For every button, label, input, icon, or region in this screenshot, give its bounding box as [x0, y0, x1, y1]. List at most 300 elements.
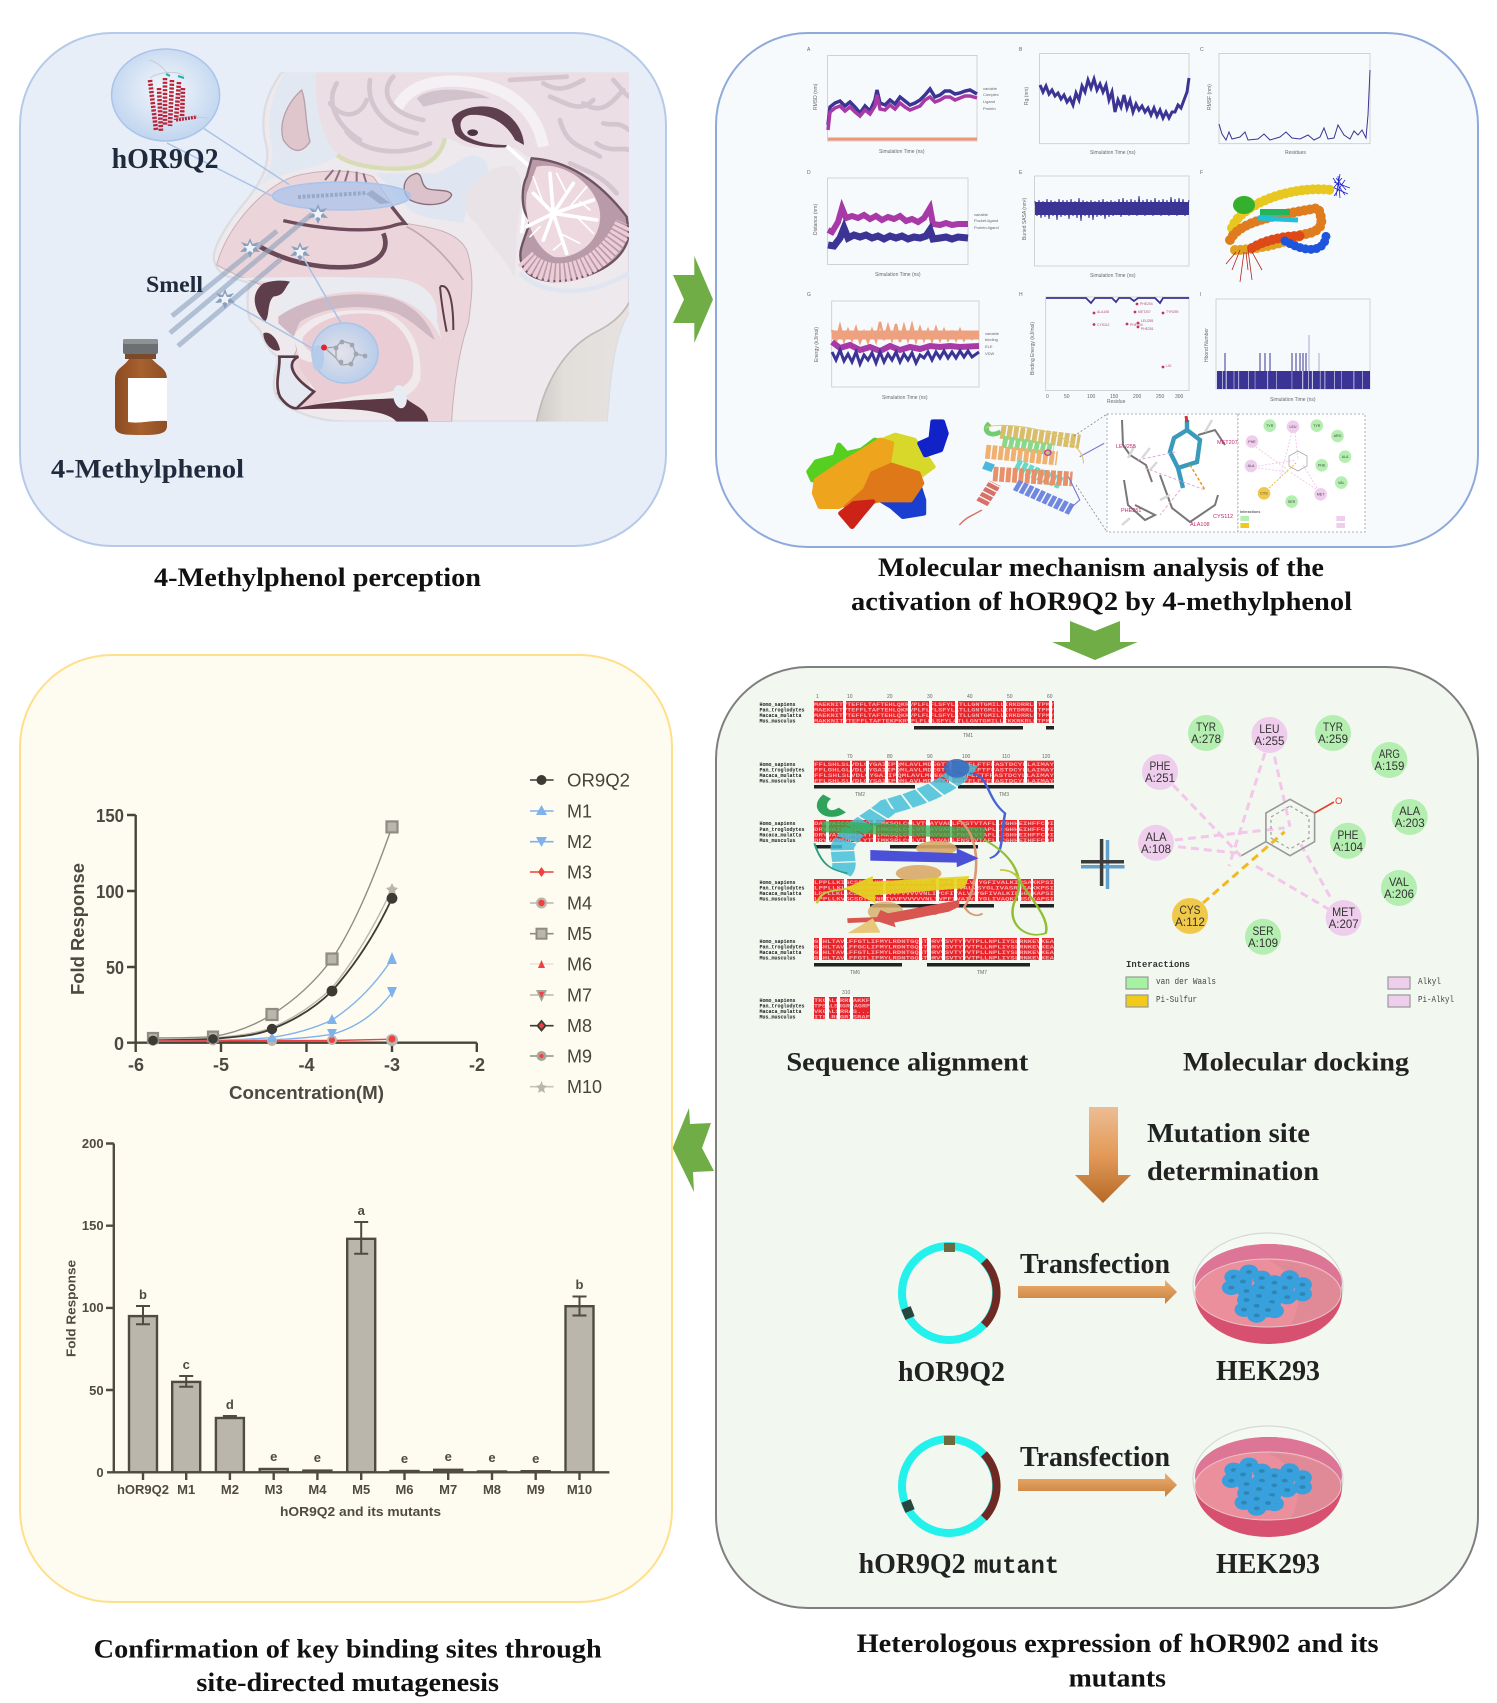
- chart D: distance: [807, 170, 999, 278]
- label: HEK293 mutant: HEK293: [1216, 1549, 1320, 1580]
- chart H: binding energy by residue: 100: [1087, 394, 1096, 400]
- bar chart: fold response: M3: [265, 1482, 283, 1497]
- icon: HEK293 culture dish mutant: [1193, 1426, 1343, 1537]
- legend: interactions: van der Waals: [1156, 977, 1216, 987]
- docking 2D mini diagram: CYS: [1260, 492, 1268, 496]
- sequence alignment blocks: DRYVAICQPLLYTTIMKSQLCGLVTGAYVAGLFNSTVTAFLLCGHHEIHFFCDI: [814, 832, 1054, 838]
- bar chart: fold response: M7: [439, 1482, 457, 1497]
- caption: molecular mechanism: Molecular mechanism analysis of the: [878, 553, 1324, 582]
- sequence alignment blocks: TKGALRRRPAKKF: [814, 998, 870, 1004]
- sequence alignment blocks: Pan_troglodytes: [760, 886, 805, 892]
- chart H: binding energy by residue: ALA108: [1097, 310, 1109, 314]
- chart A: RMSD: [807, 47, 999, 155]
- docking zoom box: 3D binding site: PHE251: [1121, 508, 1142, 514]
- sequence alignment blocks: 40: [967, 694, 973, 700]
- sequence alignment blocks: 80: [887, 754, 893, 760]
- docking 2D mini diagram: ALA: [1248, 464, 1255, 468]
- bar chart: fold response: b: [139, 1287, 147, 1302]
- icon: odorant stars: [215, 204, 328, 309]
- residue: ARG A:159: [1371, 742, 1407, 778]
- chart H: binding energy by residue: 200: [1133, 394, 1142, 400]
- residue: PHE A:251: A:251: [1145, 771, 1175, 785]
- chart A: RMSD: Protein: [983, 106, 996, 111]
- chart H: binding energy by residue: CYS112: [1097, 323, 1109, 327]
- legend: interactions: [1126, 960, 1454, 1007]
- residue: ALA A:108: ALA: [1146, 830, 1166, 844]
- docking zoom box: 3D binding site: CYS112: [1213, 514, 1233, 520]
- residue: TYR A:259: [1315, 715, 1351, 751]
- label: 4-Methylphenol: 4-Methylphenol: [51, 454, 244, 484]
- sequence alignment blocks: 90: [927, 754, 933, 760]
- chart G: energy: Energy (kJ/mol): [814, 327, 820, 362]
- chart H: binding energy by residue: PHE104: [1130, 323, 1143, 327]
- heading: Molecular docking: Molecular docking: [1183, 1048, 1409, 1077]
- chart D: distance: Simulation Time (ns): [875, 272, 921, 278]
- sequence alignment blocks: DRYVAICQPLLYTTIMKSQLCGLVTGAYVAGLFNSTVTAPLLCGHHEIHFFCDI: [814, 827, 1054, 833]
- sequence alignment blocks: TPSALSRGRPAGRP: [814, 1004, 870, 1010]
- sequence alignment blocks: Mus_musculus: [760, 1014, 796, 1020]
- chart H: binding energy by residue: MET207: [1138, 310, 1151, 314]
- bar chart: fold response: 150: [82, 1218, 104, 1233]
- sequence alignment blocks: DRYVAVCQPLLYTTIMKSRLCGLVTGAYVAGLFNSTVTAFLLCGHHEIHFFCDI: [814, 838, 1054, 844]
- bar chart: fold response: 50: [89, 1383, 104, 1398]
- chart H: binding energy by residue: LIG: [1166, 364, 1172, 368]
- residue: VAL A:206: [1381, 870, 1417, 906]
- sequence alignment blocks: ITSLRRGRISRAF: [814, 1014, 870, 1020]
- legend: dose response series: M10: [567, 1077, 602, 1097]
- line chart: dose response: -2: [469, 1055, 485, 1075]
- sequence alignment blocks: TM1: [963, 733, 973, 739]
- residue: CYS A:112: A:112: [1175, 915, 1205, 929]
- line chart: dose response: 50: [106, 958, 124, 978]
- sequence alignment blocks: Macaca_mulatta: [760, 713, 802, 719]
- caption: molecular mechanism: activation of hOR9Q2 by 4-methylphenol: [851, 587, 1352, 616]
- sequence alignment blocks: TM7: [977, 970, 987, 976]
- chart C: RMSF: C: [1200, 47, 1204, 53]
- caption: confirmation of key binding sites: Confirmation of key binding sites through: [94, 1635, 602, 1664]
- chart G: energy: VDW: [985, 351, 995, 356]
- sequence alignment blocks: Macaca_mulatta: [760, 1009, 802, 1015]
- chart I: hydrogen bonds: [1200, 292, 1370, 403]
- sequence alignment blocks: GSHLTAVLFFGTLIFMYLRDNTGQSTDRVVSVTYVVTPLLNPLIYSLRNKEVKEA: [814, 950, 1054, 956]
- sequence alignment blocks: 20: [887, 694, 893, 700]
- sequence alignment blocks: 120: [1042, 754, 1051, 760]
- label: Transfection mutant: Transfection: [1020, 1442, 1170, 1473]
- sequence alignment blocks: GSHLTAVLFFGCLIFMYLRDNTGQSTDRVVSVTYVVTPLLNPLIYSLRNKEVKEA: [814, 944, 1054, 950]
- sequence alignment blocks: VKGALSRRAS...: [814, 1009, 870, 1015]
- chart D: distance: Distance (nm): [813, 204, 819, 235]
- legend: dose response series: M9: [567, 1046, 592, 1066]
- ligand: methylphenol ring: [1241, 796, 1342, 856]
- icon: plasmid hOR9Q2 mutant: [902, 1436, 997, 1533]
- line chart: dose response: -6: [128, 1055, 144, 1075]
- residue: MET A:207: MET: [1332, 905, 1356, 919]
- chart H: binding energy by residue: 0: [1046, 394, 1049, 400]
- docking 2D mini diagram: PHE: [1248, 440, 1256, 444]
- chart B: Rg: B: [1019, 47, 1023, 53]
- sequence alignment blocks: Homo_sapiens: [760, 821, 796, 827]
- label: hOR9Q2 mutant: mutant: [974, 1552, 1059, 1581]
- residue: VAL A:206: VAL: [1389, 875, 1409, 889]
- residue: SER A:109: [1245, 919, 1281, 955]
- sequence alignment blocks: Mus_musculus: [760, 896, 796, 902]
- bar chart: fold response: hOR9Q2: [117, 1482, 169, 1497]
- chart H: binding energy by residue: TYR259: [1166, 310, 1179, 314]
- bar chart: fold response: M5: [352, 1482, 370, 1497]
- chart C: RMSF: Residues: [1285, 150, 1306, 156]
- bar chart: fold response: d: [226, 1397, 234, 1412]
- sequence alignment blocks: Macaca_mulatta: [760, 832, 802, 838]
- sequence alignment blocks: 1: [816, 694, 819, 700]
- legend: dose response series: M8: [567, 1016, 592, 1036]
- legend: interactions: Interactions: [1126, 960, 1190, 970]
- residue: TYR A:259: TYR: [1323, 720, 1343, 734]
- chart D: distance: Pocket-ligand: [974, 218, 998, 223]
- residue: LEU A:255: A:255: [1254, 734, 1285, 748]
- residue: MET A:207: A:207: [1329, 917, 1359, 931]
- chart A: RMSD: Simulation Time (ns): [879, 149, 925, 155]
- bar chart: fold response: hOR9Q2 and its mutants: [280, 1504, 441, 1519]
- ligand: methylphenol ring: O: [1335, 796, 1342, 807]
- icon J: protein surface: [809, 422, 946, 527]
- sequence alignment blocks: Pan_troglodytes: [760, 768, 805, 774]
- sequence alignment blocks: FFLSHLSLVDLCYSAIIPQMLAVLMDEGTTISQFFLFTFFASTDCYLLAIMAY: [814, 778, 1054, 784]
- icon: brown bottle: [115, 339, 167, 435]
- chart G: energy: variable: [985, 331, 1000, 336]
- panel: site-directed mutagenesis: [20, 655, 672, 1602]
- illustration: head anatomy: [214, 72, 629, 422]
- line chart: dose response: [68, 806, 485, 1103]
- docking 2D mini diagram: [1238, 414, 1365, 532]
- chart I: hydrogen bonds: Hbond Number: [1204, 328, 1210, 362]
- bar chart: fold response: Fold Response: [64, 1260, 78, 1357]
- sequence alignment blocks: TM5: [927, 911, 937, 917]
- residue: ARG A:159: A:159: [1374, 759, 1405, 773]
- text: mutation site determination: [1147, 1118, 1319, 1186]
- chart H: binding energy by residue: Binding Energy (kJ/mol): [1030, 322, 1036, 375]
- caption: confirmation of key binding sites: [94, 1635, 602, 1697]
- bar chart: fold response: a: [358, 1203, 366, 1218]
- sequence alignment blocks: TM6: [850, 970, 860, 976]
- sequence alignment blocks: 30: [927, 694, 933, 700]
- sequence alignment blocks: MAEKNITVTEFFLTAFTEHLQKRVPLFLFLSFYLATLLGNTGMILLIRKDRRLHTPMY: [814, 702, 1054, 708]
- bar chart: fold response: M8: [483, 1482, 501, 1497]
- sequence alignment blocks: 310: [842, 990, 851, 996]
- residue: PHE A:251: [1142, 754, 1178, 790]
- docking 2D mini diagram: VAL: [1338, 481, 1345, 485]
- sequence alignment blocks: MAEKNITVTEFFLTAFTEHLQKRVPLFLFLSFYLATLLGNTGMILLIRTDRRLHTPMY: [814, 708, 1054, 714]
- chart H: binding energy by residue: Residue: [1107, 399, 1126, 405]
- icon: hOR9Q2 protein circle: [112, 49, 220, 141]
- legend: interactions: Alkyl: [1418, 977, 1441, 987]
- label: Smell: Smell: [146, 272, 203, 297]
- residue: PHE A:104: A:104: [1333, 840, 1363, 854]
- sequence alignment blocks: Pan_troglodytes: [760, 944, 805, 950]
- legend: dose response series: M5: [567, 924, 592, 944]
- sequence alignment blocks: LPPLLKVSCSDTRVNEIVVFVVVVVNLIVPFIVAIVSYGLIVAQKIRSGKAPSI: [814, 896, 1054, 902]
- sequence alignment blocks: LPPLLKLSCSDTRVNEIVVFVVVVVNLIVCFIVALVSYGFIVALKIRSGGKAPSI: [814, 891, 1054, 897]
- chart A: RMSD: variable: [983, 86, 998, 91]
- sequence alignment blocks: Mus_musculus: [760, 838, 796, 844]
- bar chart: fold response: e: [401, 1451, 408, 1466]
- bar chart: fold response: e: [488, 1450, 496, 1465]
- sequence alignment blocks: Mus_musculus: [760, 956, 796, 962]
- chart I: hydrogen bonds: I: [1200, 292, 1201, 298]
- chart D: distance: D: [807, 170, 811, 176]
- bar chart: fold response: b: [576, 1277, 584, 1292]
- label: hOR9Q2 plasmid: hOR9Q2: [898, 1357, 1005, 1388]
- icon: HEK293 culture dish: [1193, 1233, 1343, 1344]
- chart B: Rg: Simulation Time (ns): [1090, 150, 1136, 156]
- legend: dose response series: M2: [567, 832, 592, 852]
- bar chart: fold response: M4: [308, 1482, 327, 1497]
- sequence alignment blocks: Pan_troglodytes: [760, 827, 805, 833]
- chart A: RMSD: Complex: [983, 92, 999, 97]
- sequence alignment blocks: Homo_sapiens: [760, 762, 796, 768]
- chart H: binding energy by residue: 50: [1064, 394, 1070, 400]
- chart D: distance: variable: [974, 212, 989, 217]
- sequence alignment blocks: LPPLLKLSCSDTRVNEIVVFVVVVVNLIVPFIVALVSYGLIVASRRSAKKPSI: [814, 886, 1054, 892]
- sequence alignment blocks: Macaca_mulatta: [760, 773, 802, 779]
- residue: PHE A:251: PHE: [1150, 759, 1170, 773]
- sequence alignment blocks: Pan_troglodytes: [760, 1004, 805, 1010]
- caption: molecular mechanism: [851, 553, 1352, 616]
- sequence alignment blocks: 110: [1002, 754, 1010, 760]
- label: Transfection: Transfection: [1020, 1249, 1170, 1280]
- bar chart: fold response: M2: [221, 1482, 239, 1497]
- legend: dose response series: M7: [567, 986, 592, 1006]
- caption: heterologous expression: Heterologous expression of hOR902 and its: [857, 1629, 1379, 1658]
- legend: dose response series: M3: [567, 862, 592, 882]
- legend: dose response series: [530, 770, 630, 1097]
- caption: 4-methylphenol perception: 4-Methylphenol perception: [154, 563, 482, 592]
- line chart: dose response: -4: [298, 1055, 315, 1075]
- chart I: hydrogen bonds: Simulation Time (ns): [1270, 397, 1316, 403]
- sequence alignment blocks: 60: [1047, 694, 1053, 700]
- line chart: dose response: -5: [213, 1055, 229, 1075]
- docking 2D mini diagram: MET: [1317, 492, 1325, 496]
- sequence alignment blocks: GSHLTAVLFFGTLIFMYLRDNTGQSTDRVVSVTYVVTPLLNPLIYSLRNKEVKEA: [814, 939, 1054, 945]
- sequence alignment blocks: Homo_sapiens: [760, 998, 796, 1004]
- residue: LEU A:255: LEU: [1259, 722, 1279, 736]
- residue: ALA A:203: ALA: [1399, 804, 1420, 818]
- bar chart: fold response: e: [314, 1450, 321, 1465]
- line chart: dose response: -3: [384, 1055, 400, 1075]
- chart G: energy: G: [807, 292, 811, 298]
- heading: Sequence alignment: Sequence alignment: [786, 1048, 1029, 1077]
- chart H: binding energy by residue: PHE204: [1140, 302, 1153, 306]
- text: mutation site determination: determination: [1147, 1156, 1319, 1186]
- chart H: binding energy by residue: 300: [1175, 394, 1184, 400]
- arrow: transfection mutant: [1018, 1473, 1177, 1497]
- chart C: RMSF: [1200, 47, 1370, 156]
- residue: PHE A:104: PHE: [1338, 828, 1358, 842]
- chart H: binding energy by residue: 150: [1110, 394, 1119, 400]
- legend: dose response series: M6: [567, 954, 592, 974]
- molecular docking diagram: [1138, 715, 1428, 955]
- caption: heterologous expression: [857, 1629, 1379, 1692]
- residue: ALA A:203: A:203: [1395, 816, 1425, 830]
- sequence alignment blocks: DAYVAICQPLLYTTIMKSQLCGLVTGAYVAGLFNSTVTAFLLCGHHEIHFFCDI: [814, 821, 1054, 827]
- line chart: dose response: 0: [114, 1034, 124, 1054]
- icon F: protein trajectory: F: [1200, 170, 1203, 176]
- legend: dose response series: OR9Q2: [567, 770, 630, 790]
- docking 2D mini diagram: SER: [1288, 500, 1296, 504]
- chart A: RMSD: RMSD (nm): [813, 83, 819, 110]
- chart H: binding energy by residue: PHE251: [1141, 327, 1154, 331]
- bar chart: fold response: e: [270, 1449, 277, 1464]
- line chart: dose response: Fold Response: [68, 863, 88, 995]
- chart D: distance: Protein-ligand: [974, 225, 999, 230]
- residue: SER A:109: A:109: [1248, 936, 1278, 950]
- sequence alignment blocks: 70: [847, 754, 853, 760]
- sequence alignment blocks: FFLSHLSLVDLCYGAIIPQMLAVLMDEGTTISQFFLFTFFASTDCYLLAIMAY: [814, 762, 1054, 768]
- chart H: binding energy by residue: H: [1019, 292, 1023, 298]
- sequence alignment blocks: Homo_sapiens: [760, 702, 796, 708]
- chart H: binding energy by residue: 250: [1156, 394, 1165, 400]
- bar chart: fold response: e: [445, 1449, 452, 1464]
- residue: TYR A:259: A:259: [1318, 732, 1348, 746]
- residue: MET A:207: [1326, 900, 1362, 936]
- bar chart: fold response: M1: [177, 1482, 195, 1497]
- label: hOR9Q2 mutant: hOR9Q2: [859, 1549, 966, 1580]
- sequence alignment blocks: 100: [962, 754, 971, 760]
- chart G: energy: Simulation Time (ns): [882, 395, 928, 401]
- residue: TYR A:278: TYR: [1196, 720, 1216, 734]
- chart A: RMSD: Ligand: [983, 99, 995, 104]
- sequence alignment blocks: GSHLTAVLFFGTLIFMYLRDNTGQSTDRVVSVTYVVTPLLNPLIYSLRNKEVKEA: [814, 956, 1054, 962]
- bar chart: fold response: 0: [96, 1465, 104, 1480]
- chart E: SASA: Simulation Time (ns): [1090, 273, 1136, 279]
- sequence alignment blocks: [760, 694, 1054, 1020]
- residue: LEU A:255: [1251, 717, 1287, 753]
- residue: ALA A:203: [1392, 799, 1428, 835]
- icon J: protein ribbon: [959, 423, 1104, 525]
- sequence alignment blocks: 10: [847, 694, 853, 700]
- residue: ARG A:159: ARG: [1379, 747, 1400, 761]
- chart A: RMSD: A: [807, 47, 811, 53]
- residue: VAL A:206: A:206: [1384, 887, 1414, 901]
- line chart: dose response: Concentration(M): [229, 1083, 384, 1103]
- docking 2D mini diagram: Interactions: [1240, 510, 1260, 514]
- callout: olfactory epithelium ellipse: [272, 182, 410, 210]
- sequence alignment blocks: Homo_sapiens: [760, 880, 796, 886]
- docking zoom box: 3D binding site: ALA108: [1190, 522, 1210, 528]
- chart G: energy: binding: [985, 337, 998, 342]
- sequence alignment blocks: Homo_sapiens: [760, 939, 796, 945]
- bar chart: fold response: M6: [395, 1482, 414, 1497]
- sequence alignment blocks: 50: [1007, 694, 1013, 700]
- icon: smell streaks: [170, 214, 312, 346]
- icon: 4-methylphenol molecule circle: [312, 323, 378, 383]
- bar chart: fold response: M10: [567, 1482, 592, 1497]
- residue: ALA A:108: A:108: [1141, 842, 1171, 856]
- icon: plasmid hOR9Q2: [902, 1243, 997, 1340]
- line chart: dose response: 100: [96, 882, 124, 902]
- arrow: transfection: [1018, 1280, 1177, 1304]
- label: HEK293: HEK293: [1216, 1356, 1320, 1387]
- sequence alignment blocks: Pan_troglodytes: [760, 708, 805, 714]
- bar chart: fold response: M9: [527, 1482, 545, 1497]
- chart G: energy: [807, 292, 1000, 401]
- chart H: binding energy by residue: [1019, 292, 1189, 405]
- panel: heterologous expression: [716, 667, 1478, 1608]
- residue: SER A:109: SER: [1252, 924, 1274, 938]
- icon F: protein trajectory: [1200, 170, 1350, 282]
- sequence alignment blocks: TM4: [928, 852, 938, 858]
- sequence alignment blocks: Macaca_mulatta: [760, 950, 802, 956]
- chart E: SASA: [1019, 170, 1189, 279]
- sequence alignment blocks: Mus_musculus: [760, 718, 796, 724]
- text: mutation site determination: Mutation site: [1147, 1118, 1310, 1148]
- arrow: green right: [673, 256, 713, 343]
- sequence alignment blocks: FFLGHLGLVDLCYGAIIPQMLAVLMDEGTTISQFFLFTFFASTDCYLLAIMAY: [814, 768, 1054, 774]
- bar chart: fold response: 100: [82, 1300, 104, 1315]
- chart B: Rg: Rg (nm): [1024, 87, 1030, 105]
- legend: interactions: Pi-Alkyl: [1418, 995, 1454, 1005]
- residue: CYS A:112: [1172, 898, 1208, 934]
- icon: plus sign: [1081, 839, 1124, 889]
- arrow: green down: [1052, 621, 1138, 660]
- legend: dose response series: M4: [567, 894, 592, 914]
- docking 2D mini diagram: ALA: [1342, 455, 1349, 459]
- docking 2D mini diagram: TYR: [1313, 424, 1321, 428]
- label: hOR9Q2 mutant: [859, 1549, 1059, 1581]
- bar chart: fold response: e: [532, 1451, 539, 1466]
- sequence alignment blocks: Mus_musculus: [760, 778, 796, 784]
- callout lines from protein and molecule: [167, 129, 342, 351]
- bar chart: fold response: 200: [82, 1136, 104, 1151]
- residue: CYS A:112: CYS: [1180, 903, 1200, 917]
- sequence alignment blocks: Macaca_mulatta: [760, 891, 802, 897]
- label: hOR9Q2: hOR9Q2: [112, 144, 219, 175]
- panel: molecular dynamics analysis: [716, 33, 1478, 547]
- docking zoom box: 3D binding site: LEU255: [1116, 444, 1136, 450]
- icon: protein ribbon over alignment: [814, 759, 1046, 935]
- legend: interactions: Pi-Sulfur: [1156, 995, 1197, 1005]
- bar chart: fold response: c: [183, 1357, 190, 1372]
- docking 2D mini diagram: ARG: [1334, 434, 1342, 438]
- docking 2D mini diagram: PHE: [1318, 464, 1326, 468]
- docking 2D mini diagram: TYR: [1266, 424, 1274, 428]
- chart C: RMSF: RMSF (nm): [1207, 84, 1213, 110]
- panel: 4-methylphenol perception: [20, 33, 666, 546]
- sequence alignment blocks: LPPLLKISCSDTRVNEIVVFVVVVVNLIVPFIVVLVSYGFIVALKIRSAKKPSI: [814, 880, 1054, 886]
- caption: confirmation of key binding sites: site-directed mutagenesis: [196, 1668, 499, 1697]
- bar chart: fold response: [64, 1136, 609, 1519]
- sequence alignment blocks: MAEKNITVTEFFLTAFTEHLQKRVPLFLFLSFYLATLLGNTGMILLIRKDRRLHTPMY: [814, 713, 1054, 719]
- residue: ALA A:108: [1138, 825, 1174, 861]
- sequence alignment blocks: MAKKNITVTEFFLTAFTEKPKRVPLFLFLSFYLATLLGNTGMILLIKKRKRLHTPMY: [814, 718, 1054, 724]
- docking zoom box: 3D binding site: [1074, 414, 1238, 532]
- arrow: orange down: [1075, 1107, 1131, 1203]
- chart E: SASA: E: [1019, 170, 1023, 176]
- docking 2D mini diagram: LEU: [1290, 425, 1297, 429]
- residue: TYR A:278: [1188, 715, 1224, 751]
- sequence alignment blocks: TM3: [999, 792, 1009, 798]
- docking zoom box: 3D binding site: MET207: [1217, 440, 1238, 446]
- line chart: dose response: 150: [96, 806, 124, 826]
- chart B: Rg: [1019, 47, 1189, 156]
- legend: dose response series: M1: [567, 802, 592, 822]
- caption: heterologous expression: mutants: [1069, 1664, 1166, 1692]
- chart E: SASA: Buried SASA (nm²): [1022, 197, 1028, 240]
- arrow: green left: [673, 1108, 714, 1192]
- residue: TYR A:278: A:278: [1191, 732, 1221, 746]
- chart G: energy: ELE: [985, 344, 993, 349]
- chart H: binding energy by residue: LEU255: [1141, 319, 1153, 323]
- sequence alignment blocks: TM2: [855, 792, 865, 798]
